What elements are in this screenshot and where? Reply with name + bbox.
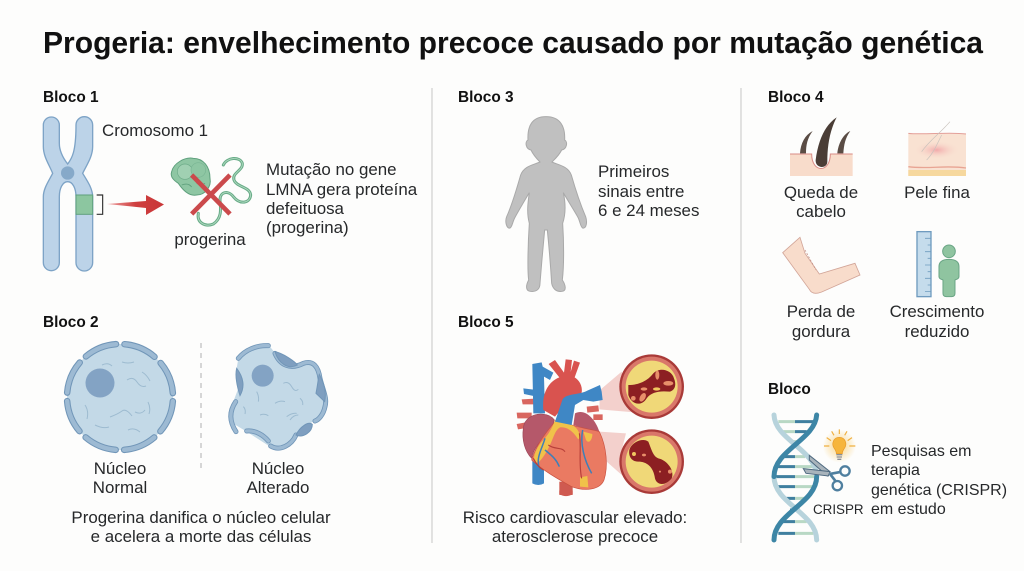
label: crescimento reduzido: Crescimento xyxy=(890,302,984,321)
text: nucleus damage description: e acelera a morte das células xyxy=(91,527,311,546)
text: gene therapy research: Pesquisas em xyxy=(871,443,972,460)
icon: hair loss xyxy=(790,117,853,176)
text: gene therapy research: terapia xyxy=(871,462,920,479)
text: cardiovascular risk: aterosclerose precoce xyxy=(492,527,658,546)
label: nucleo normal: Núcleo xyxy=(94,459,146,478)
icon: altered nucleus xyxy=(230,346,327,448)
label: perda de gordura: Perda de xyxy=(787,302,855,321)
icon: loss of fat arm xyxy=(783,237,860,293)
icon: normal nucleus xyxy=(67,344,173,450)
text: mutation description: (progerina) xyxy=(266,218,349,237)
text: first signs: Primeiros xyxy=(598,162,669,181)
panel: bloco 3 xyxy=(458,89,699,291)
title: Progeria: envelhecimento precoce causado por mutação genética xyxy=(43,25,984,60)
panel: bloco 5 xyxy=(458,314,687,546)
panel: bloco research xyxy=(768,381,1007,540)
icon: thin skin xyxy=(908,122,966,176)
heading: bloco 3: Bloco 3 xyxy=(458,89,514,106)
panel: bloco 2 xyxy=(43,314,331,546)
heading: bloco 5: Bloco 5 xyxy=(458,314,514,331)
panel: bloco 4 xyxy=(768,89,984,341)
label: nucleo normal: Normal xyxy=(93,478,147,497)
icon: dna helix with scissors and bulb xyxy=(774,415,856,540)
label: progerina: progerina xyxy=(174,230,246,249)
arrow: mutation to protein xyxy=(107,195,164,215)
icon: defective progerin protein xyxy=(171,158,251,225)
text: mutation description: Mutação no gene xyxy=(266,160,397,179)
icon: child silhouette xyxy=(506,117,587,291)
label: crescimento reduzido: reduzido xyxy=(905,322,969,341)
label: perda de gordura: gordura xyxy=(792,322,851,341)
label: queda de cabelo: cabelo xyxy=(796,202,846,221)
label: pele fina: Pele fina xyxy=(904,183,970,202)
text: gene therapy research: em estudo xyxy=(871,501,946,518)
text: first signs: 6 e 24 meses xyxy=(598,201,699,220)
heading: bloco 4: Bloco 4 xyxy=(768,89,824,106)
text: first signs: sinais entre xyxy=(598,182,684,201)
panel: bloco 1 xyxy=(43,89,418,271)
text: mutation description: LMNA gera proteína xyxy=(266,180,418,199)
label: nucleo alterado: Alterado xyxy=(247,478,309,497)
heading: bloco 2: Bloco 2 xyxy=(43,314,99,331)
icon: chromosome xyxy=(43,117,103,271)
text: cardiovascular risk: Risco cardiovascular elevado: xyxy=(463,508,687,527)
icon: ruler and small person xyxy=(917,232,959,297)
heading: bloco: Bloco xyxy=(768,381,811,398)
text: gene therapy research: genética (CRISPR) xyxy=(871,482,1007,499)
text: mutation description: defeituosa xyxy=(266,199,345,218)
heading: bloco 1: Bloco 1 xyxy=(43,89,99,106)
label: crispr: CRISPR xyxy=(813,502,864,517)
icon: heart with arteries xyxy=(517,354,684,496)
label: queda de cabelo: Queda de xyxy=(784,183,858,202)
label: cromosomo 1: Cromosomo 1 xyxy=(102,121,208,140)
text: nucleus damage description: Progerina danifica o núcleo celular xyxy=(71,508,331,527)
label: nucleo alterado: Núcleo xyxy=(252,459,304,478)
